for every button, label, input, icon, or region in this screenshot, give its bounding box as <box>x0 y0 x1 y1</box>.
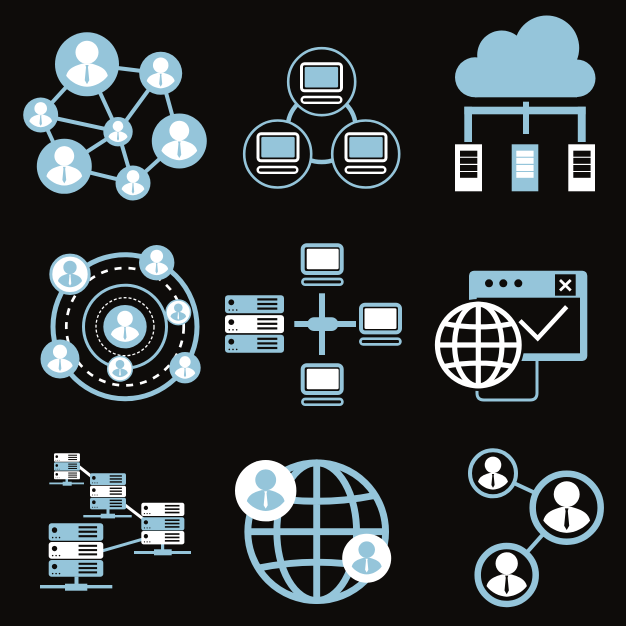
server rack <box>225 295 284 353</box>
right server <box>568 144 595 191</box>
icon: blue globe <box>248 463 386 601</box>
person circle bottom <box>478 546 536 604</box>
right computer <box>346 134 386 173</box>
browser window <box>469 271 587 361</box>
top computer <box>302 245 342 285</box>
server stack 2 <box>83 473 132 518</box>
lower box outline <box>477 358 537 400</box>
orbit rings <box>53 255 197 399</box>
left server <box>455 144 482 191</box>
panel: browser window and globe <box>432 271 587 400</box>
panel: orbit of people <box>40 245 201 399</box>
person circle small <box>470 450 516 496</box>
middle server <box>512 144 538 191</box>
panel: three connected computers <box>244 48 399 188</box>
computer circles <box>244 48 399 188</box>
top computer <box>302 64 342 103</box>
orbit person nodes <box>40 245 201 383</box>
link lines <box>493 473 567 575</box>
server stack 3 <box>134 503 191 555</box>
bottom computer <box>302 365 342 405</box>
person circle large <box>533 474 601 542</box>
network connector lines <box>41 64 179 183</box>
panel: cloud with servers <box>455 16 596 191</box>
connecting arc <box>288 94 356 162</box>
panel: people network <box>23 32 207 200</box>
icon: cloud <box>455 16 596 97</box>
icon: white globe <box>432 299 524 391</box>
network person nodes <box>23 32 207 200</box>
cloud connectors <box>464 102 586 142</box>
icon: check mark <box>520 307 567 338</box>
center person <box>103 305 147 348</box>
server stack 1 <box>49 453 84 486</box>
person badge left <box>235 460 296 521</box>
hub cross <box>294 293 356 355</box>
panel: globe with people <box>235 460 391 601</box>
person badge right <box>342 534 391 583</box>
left computer <box>258 134 298 173</box>
panel: server and computers hub <box>225 245 400 405</box>
panel: connected server stacks <box>40 453 191 591</box>
server stack 4 <box>40 523 112 591</box>
right computer <box>360 305 400 344</box>
server connector lines <box>78 466 143 551</box>
panel: three linked people <box>470 450 601 604</box>
